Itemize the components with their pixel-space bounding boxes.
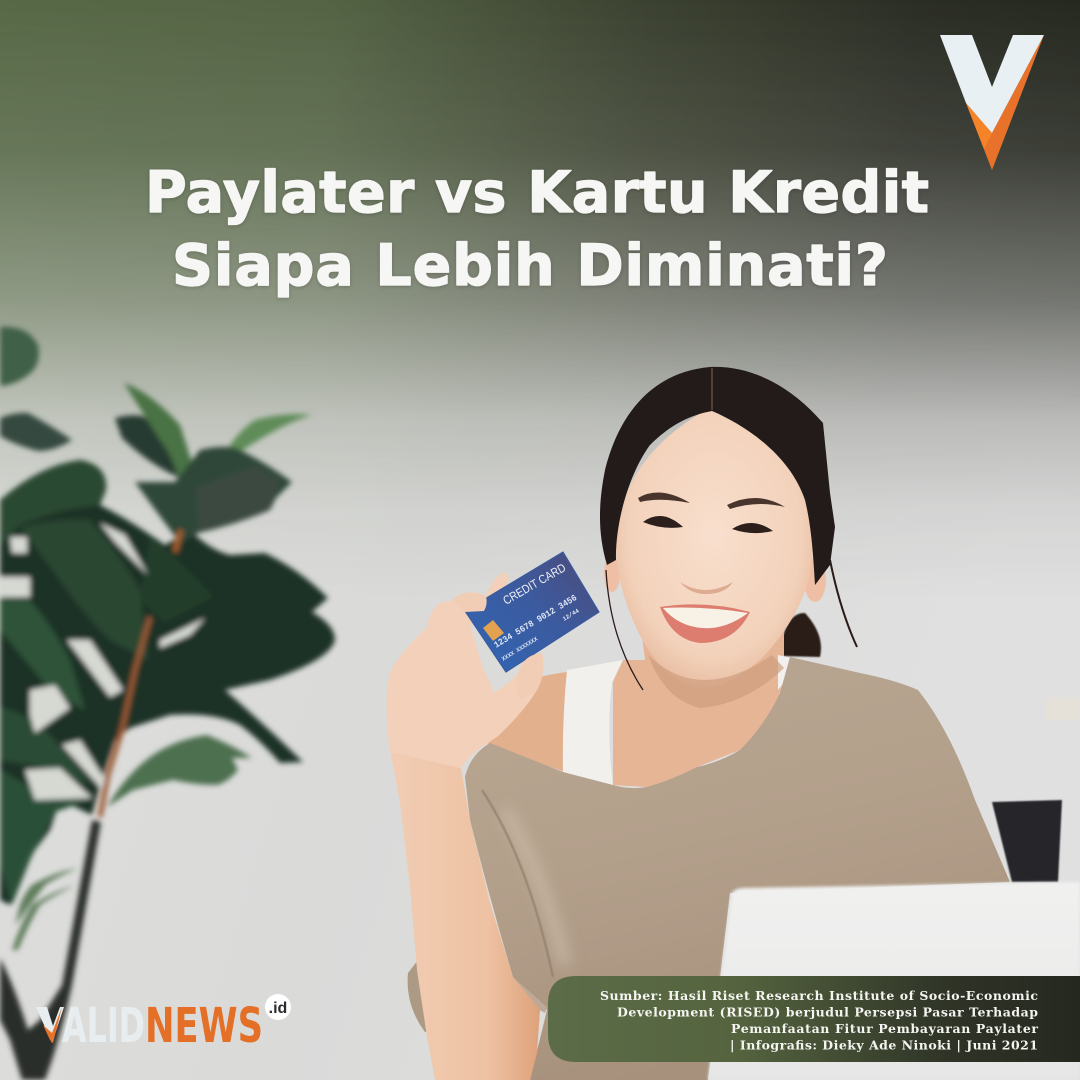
source caption bar [548, 976, 1080, 1062]
credit card: XXXX XXXXXXX [500, 635, 539, 663]
logo: VALIDNEWS.id: ALID [62, 998, 145, 1054]
sleeve back [408, 960, 480, 1032]
arm [390, 750, 540, 1080]
background wall with gradient header [0, 0, 1080, 718]
holes in foliage [0, 523, 205, 800]
laptop [708, 882, 1080, 1080]
hair strands [606, 560, 857, 690]
source text: Sumber: Hasil Riset Research Institute of Socio-Economic [600, 988, 1038, 1003]
logo: VALIDNEWS.id [36, 994, 291, 1054]
credit card: 12/44 [561, 607, 581, 623]
source text: Pemanfaatan Fitur Pembayaran Paylater [731, 1021, 1038, 1036]
nose [680, 582, 733, 594]
logo: VALIDNEWS.id: .id [269, 1000, 287, 1017]
neck and chest [613, 620, 790, 787]
eyes [643, 516, 773, 533]
source text [600, 988, 1038, 1052]
neck shadow [648, 655, 784, 708]
source text: | Infografis: Dieky Ade Ninoki | Juni 2021 [730, 1038, 1038, 1052]
title: Siapa Lebih Diminati? [172, 233, 888, 299]
credit card: CREDIT CARD [500, 560, 568, 608]
white tank top [563, 655, 792, 786]
eyebrows [638, 493, 785, 509]
smile [660, 604, 750, 643]
face [616, 408, 813, 688]
logo: V mark [940, 35, 1044, 170]
plant [0, 327, 335, 1080]
title [145, 160, 929, 299]
shoulder skin [488, 672, 567, 772]
sweater [465, 657, 1010, 1080]
fingers over card [452, 592, 543, 700]
ears [604, 556, 826, 602]
woman [387, 367, 1062, 1080]
source text: Development (RISED) berjudul Persepsi Pasar Terhadap [617, 1004, 1038, 1020]
hair highlight [711, 368, 713, 410]
hand [387, 573, 543, 768]
credit card: 1234 5678 9012 3456 [492, 593, 579, 651]
credit card [465, 552, 599, 672]
title: Paylater vs Kartu Kredit [145, 160, 929, 226]
logo: VALIDNEWS.id: NEWS [145, 998, 263, 1054]
hair [600, 367, 835, 585]
chair back [992, 800, 1062, 882]
hair bun [780, 613, 821, 657]
